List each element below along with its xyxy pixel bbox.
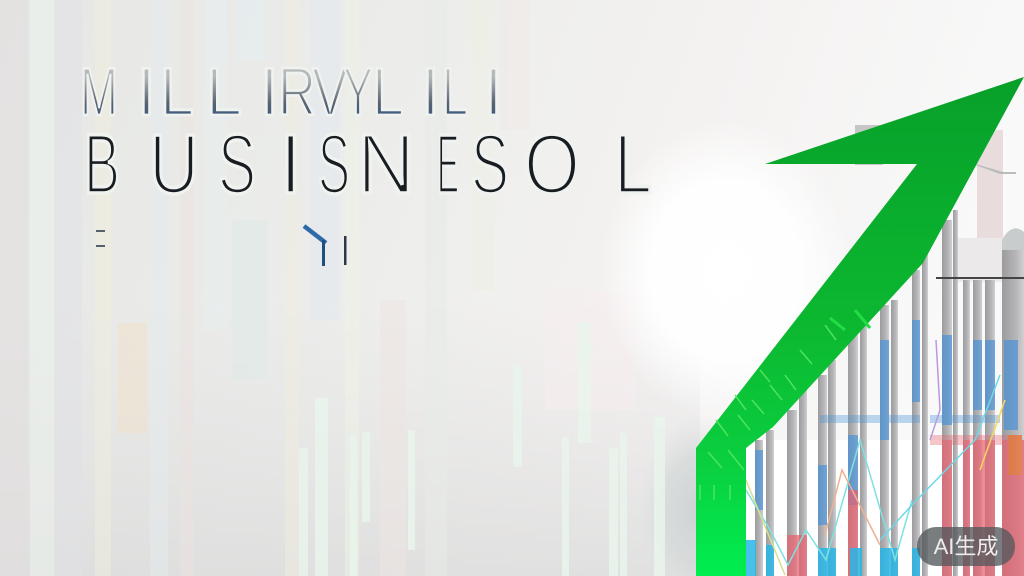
green growth arrow xyxy=(696,77,1024,576)
title line one: L xyxy=(160,54,194,130)
title line one xyxy=(80,54,503,130)
pale vertical light streaks xyxy=(299,323,665,576)
title line two: O xyxy=(524,117,580,211)
title line two: B xyxy=(84,117,120,211)
white glow behind arrow xyxy=(600,120,850,420)
title line one: L xyxy=(206,54,242,130)
title line two: L xyxy=(614,117,652,211)
badge: AI generated xyxy=(917,527,1015,566)
bar chart columns xyxy=(746,210,1024,576)
title line one: L xyxy=(442,54,468,130)
badge: AI generated: AI生成 xyxy=(934,534,998,559)
title line one: I xyxy=(484,54,503,130)
title line one: I xyxy=(260,54,279,130)
title line one: M xyxy=(80,54,118,130)
title line two: S xyxy=(218,117,256,211)
pale tower behind chart xyxy=(855,125,1024,282)
title line two: N xyxy=(357,117,415,211)
title line one: R xyxy=(278,54,316,130)
title line two: S xyxy=(471,117,509,211)
title line two: S xyxy=(318,117,350,211)
title line two: E xyxy=(437,117,459,211)
title line one: I xyxy=(137,54,156,130)
title line one: I xyxy=(421,54,440,130)
title line two: U xyxy=(149,117,199,211)
blue segments on columns xyxy=(755,320,1018,525)
title line one: Y xyxy=(343,54,373,130)
subtitle fragment xyxy=(96,226,346,266)
line chart traces xyxy=(746,340,1005,575)
red segments on columns xyxy=(787,435,1024,576)
title line one: L xyxy=(372,54,404,130)
title line two xyxy=(84,117,652,211)
cyan bars along bottom xyxy=(746,540,920,576)
title line one: V xyxy=(312,54,349,130)
title line two: I xyxy=(279,117,302,211)
